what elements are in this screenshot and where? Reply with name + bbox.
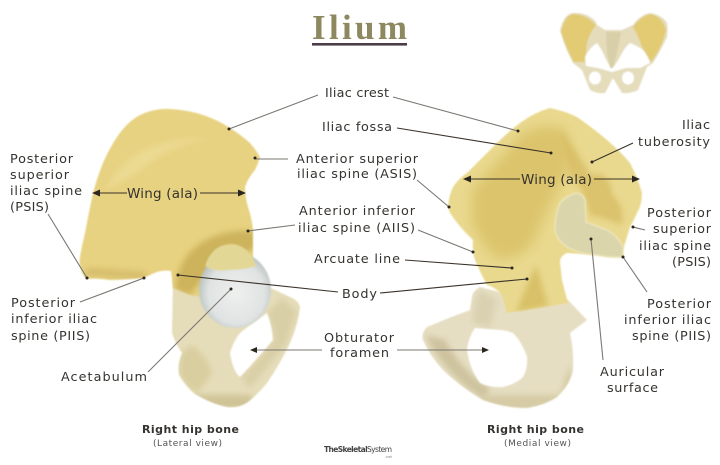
label: Iliac fossa: Iliac fossa — [322, 120, 392, 135]
label: PSIS right: (PSIS) — [672, 255, 711, 270]
auricular surface — [555, 193, 623, 257]
label: Arcuate line: Arcuate line — [314, 252, 400, 267]
panel: right hip bone lateral view — [75, 105, 305, 410]
label: Anterior inferior iliac spine (AIIS): Anterior inferior — [299, 204, 416, 219]
label: Iliac tuberosity: tuberosity — [638, 135, 710, 150]
caption: lateral view: (Lateral view) — [153, 439, 222, 449]
label: Iliac fossa — [322, 120, 552, 154]
label: PIIS right: spine (PIIS) — [632, 329, 711, 344]
label: Acetabulum — [61, 288, 232, 385]
caption: medial view: Right hip bone — [487, 423, 584, 436]
label: Acetabulum: Acetabulum — [61, 370, 147, 385]
caption: lateral view — [142, 423, 239, 449]
yellow ilium wing medial — [445, 105, 645, 317]
label: Auricular surface: surface — [607, 381, 658, 396]
caption: medial view: (Medial view) — [504, 439, 571, 449]
label: Iliac tuberosity: Iliac — [682, 118, 710, 133]
label: PIIS right: Posterior — [647, 297, 712, 312]
wing label lateral — [92, 186, 246, 202]
logo credit — [324, 445, 392, 459]
label: Iliac crest — [228, 86, 520, 132]
label: PSIS left: iliac spine — [10, 184, 82, 199]
wing label medial — [463, 172, 640, 188]
label: Auricular surface — [590, 238, 665, 396]
label: Obturator foramen: foramen — [330, 346, 389, 361]
label: PIIS right: inferior iliac — [624, 313, 711, 328]
caption: medial view — [487, 423, 584, 449]
label: Anterior superior iliac spine (ASIS): Anterior superior — [296, 152, 419, 167]
label: PSIS left: (PSIS) — [10, 200, 49, 215]
yellow ilium wing lateral — [75, 105, 265, 305]
label: PSIS right: superior — [653, 222, 712, 237]
label: Body — [176, 274, 528, 302]
caption: lateral view: Right hip bone — [142, 423, 239, 436]
label: Body: Body — [342, 287, 377, 302]
label: Arcuate line — [314, 252, 514, 270]
wing label lateral: Wing (ala) — [127, 186, 198, 202]
label: PSIS right — [632, 206, 712, 270]
title: Ilium — [312, 8, 407, 47]
logo credit: TheSkeletalSystem — [324, 445, 392, 454]
label: PIIS left: inferior iliac — [11, 312, 97, 327]
label: Anterior inferior iliac spine (AIIS) — [246, 204, 474, 254]
label: PIIS right — [622, 256, 712, 344]
label: Obturator foramen: Obturator — [324, 331, 395, 346]
lower bone medial — [422, 286, 588, 409]
label: Anterior superior iliac spine (ASIS) — [254, 152, 450, 208]
label: PIIS left: Posterior — [11, 296, 76, 311]
label: PSIS left — [10, 152, 88, 280]
label: Auricular surface: Auricular — [600, 365, 665, 380]
label: PSIS left: superior — [10, 168, 70, 183]
label: PIIS left — [11, 276, 146, 344]
label: Anterior superior iliac spine (ASIS): iliac spine (ASIS) — [297, 167, 417, 182]
wing label medial: Wing (ala) — [521, 172, 592, 188]
label: PIIS left: spine (PIIS) — [11, 329, 90, 344]
icon: small pelvis — [560, 13, 668, 93]
label: PSIS left: Posterior — [10, 152, 74, 167]
logo credit: .net — [385, 455, 392, 459]
label: PSIS right: Posterior — [647, 206, 712, 221]
label: Iliac crest: Iliac crest — [325, 86, 389, 101]
lower bone lateral — [171, 283, 301, 408]
label: PSIS right: iliac spine — [639, 239, 711, 254]
label: Obturator foramen — [250, 331, 489, 361]
panel: right hip bone medial view — [415, 105, 645, 412]
label: Anterior inferior iliac spine (AIIS): iliac spine (AIIS) — [298, 221, 415, 236]
label: Iliac tuberosity — [590, 118, 710, 164]
acetabulum cartilage — [199, 244, 271, 328]
